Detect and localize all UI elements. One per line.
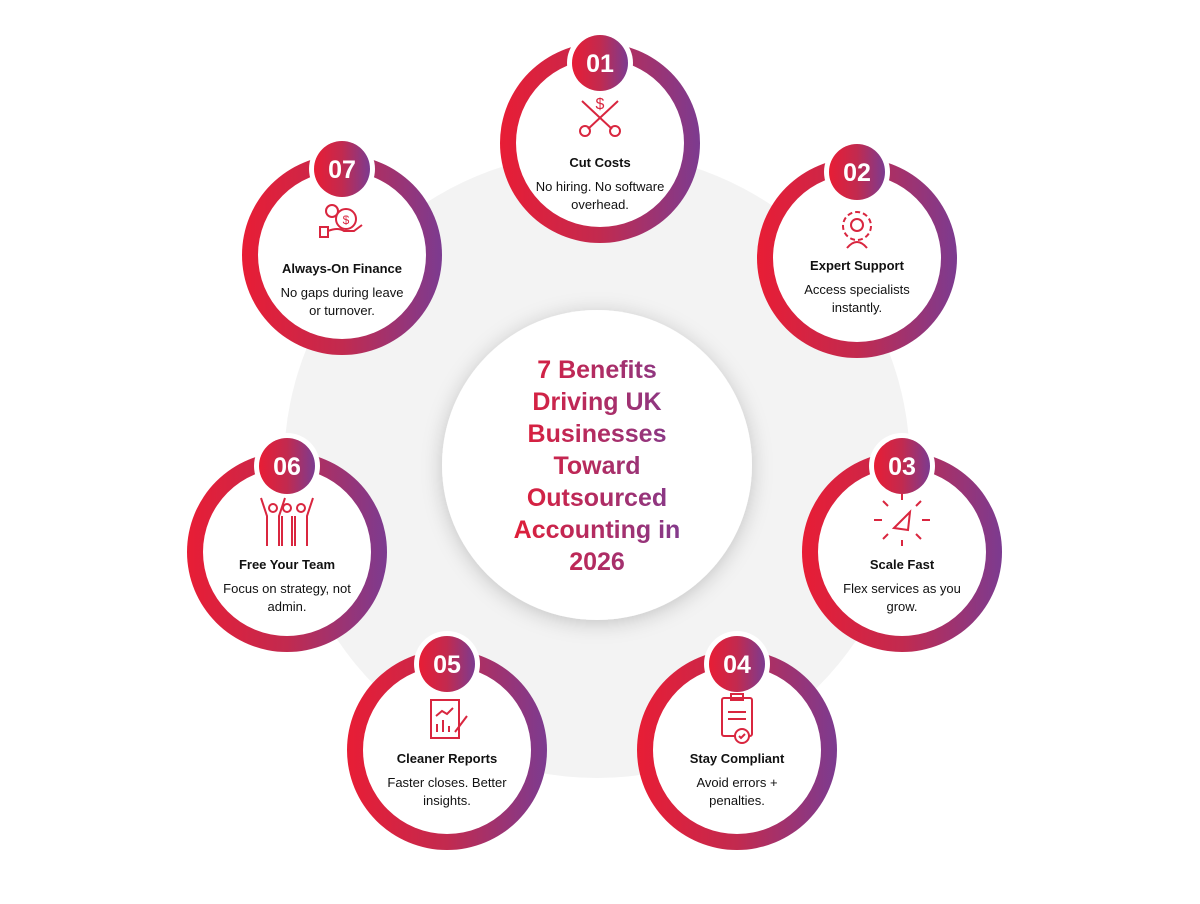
icon: clipboard check — [722, 694, 752, 743]
icon: team cheering — [261, 498, 313, 546]
item 02: Expert Support: instantly. — [832, 300, 882, 315]
item 04: Stay Compliant — [637, 631, 837, 850]
icon: gear person — [843, 212, 871, 248]
item 03: Scale Fast: 03 — [888, 453, 916, 481]
item 07: Always-On Finance: $ — [343, 213, 350, 227]
item 04: Stay Compliant: Stay Compliant — [690, 751, 785, 766]
item 02: Expert Support: Access specialists — [804, 282, 910, 297]
item 06: Free Your Team — [187, 433, 387, 652]
item 05: Cleaner Reports: insights. — [423, 793, 471, 808]
item 03: Scale Fast — [802, 433, 1002, 652]
item 07: Always-On Finance — [242, 136, 442, 355]
background disc — [284, 152, 910, 778]
item 04: Stay Compliant: 04 — [723, 651, 751, 679]
item 05: Cleaner Reports — [347, 631, 547, 850]
item 03: Scale Fast: Scale Fast — [870, 557, 935, 572]
center circle with title: Businesses — [528, 420, 666, 448]
item 01: Cut Costs: overhead. — [571, 197, 629, 212]
item 07: Always-On Finance: Always-On Finance — [282, 261, 402, 276]
icon: report chart — [431, 700, 467, 738]
center circle with title: Outsourced — [527, 484, 667, 512]
center circle with title: 2026 — [569, 548, 625, 576]
item 06: Free Your Team: Free Your Team — [239, 557, 335, 572]
item 03: Scale Fast: Flex services as you — [843, 581, 961, 596]
center circle with title: Toward — [553, 452, 641, 480]
item 01: Cut Costs: No hiring. No software — [536, 179, 664, 194]
icon: hand with coin clock — [320, 205, 362, 237]
center circle with title — [442, 310, 752, 620]
icon: scissors dollar — [580, 101, 620, 136]
center circle with title: Driving UK — [532, 388, 662, 416]
item 06: Free Your Team: admin. — [267, 599, 307, 614]
item 05: Cleaner Reports: Faster closes. Better — [387, 775, 507, 790]
item 03: Scale Fast: grow. — [886, 599, 918, 614]
item 07: Always-On Finance: 07 — [328, 156, 356, 184]
item 07: Always-On Finance: No gaps during leave — [281, 285, 403, 300]
item 07: Always-On Finance: or turnover. — [309, 303, 375, 318]
item 04: Stay Compliant: penalties. — [709, 793, 765, 808]
item 02: Expert Support: Expert Support — [810, 258, 905, 273]
item 02: Expert Support: 02 — [843, 159, 871, 187]
item 06: Free Your Team: Focus on strategy, not — [223, 581, 351, 596]
icon: rocket with arrows — [874, 494, 930, 546]
item 01: Cut Costs: Cut Costs — [569, 155, 631, 170]
item 01: Cut Costs: 01 — [586, 50, 614, 78]
item 01: Cut Costs — [500, 30, 700, 243]
item 04: Stay Compliant: Avoid errors + — [696, 775, 778, 790]
item 06: Free Your Team: 06 — [273, 453, 301, 481]
item 05: Cleaner Reports: 05 — [433, 651, 461, 679]
item 01: Cut Costs: $ — [596, 96, 605, 113]
center circle with title: 7 Benefits — [537, 356, 657, 384]
center circle with title: Accounting in — [514, 516, 680, 544]
item 05: Cleaner Reports: Cleaner Reports — [397, 751, 497, 766]
item 02: Expert Support — [757, 139, 957, 358]
